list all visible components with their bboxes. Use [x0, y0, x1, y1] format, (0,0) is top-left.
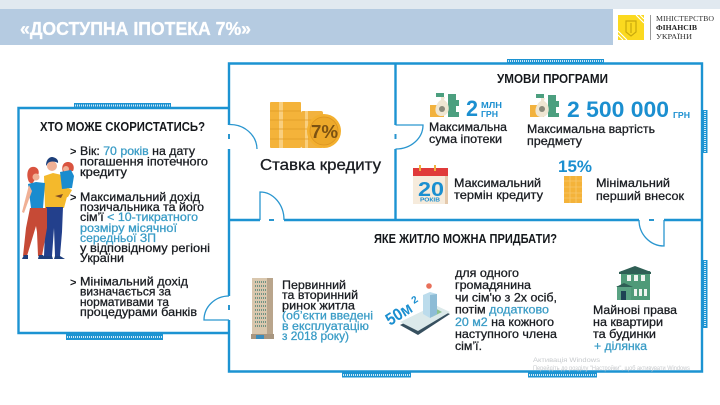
panel: program terms [413, 72, 690, 204]
icon: green house [616, 266, 651, 300]
label: credit rate: Ставка кредиту [260, 157, 381, 174]
text: primary and secondary market: та вторинний [282, 288, 358, 302]
icon: gold stack [564, 176, 582, 203]
stat: max property value: 2 500 000 [567, 97, 669, 122]
list item: maximum income: Максимальний дохід [80, 190, 200, 204]
panel: who can use [22, 120, 210, 319]
list item: age: > [70, 146, 76, 158]
list item: age: Вік: 70 років на дату [80, 144, 195, 158]
text: primary and secondary market: в експлуатацію [282, 319, 369, 333]
list item: maximum income: розміру місячної [80, 221, 178, 235]
text: area norms: наступного члена [455, 327, 557, 341]
icon: apartment tower [251, 278, 274, 339]
text: property rights: + ділянка [594, 339, 647, 353]
stat: max loan: МЛН [481, 101, 502, 110]
list item: age [70, 144, 208, 179]
list item: age: погашення іпотечного [80, 154, 208, 168]
text: max term: термін кредиту [454, 188, 543, 202]
list item: maximum income: у відповідному регіоні [80, 241, 210, 255]
icon: calendar 20 years [413, 165, 448, 204]
list item: minimum income: визначається за [80, 284, 171, 298]
list item: maximum income: позичальника та його [80, 200, 204, 214]
stat: 15 percent: 15% [558, 157, 592, 176]
list item: minimum income [70, 274, 197, 319]
title: «ДОСТУПНА ІПОТЕКА 7%» [20, 19, 251, 39]
text: minimum down payment [596, 176, 685, 203]
text: primary and secondary market [282, 278, 373, 343]
text: area norms: громадянина [455, 278, 531, 292]
heading: who can use: ХТО МОЖЕ СКОРИСТАТИСЬ? [40, 120, 205, 134]
text: primary and secondary market: (об’єкти введені [282, 308, 373, 322]
text: property rights [593, 303, 677, 353]
text: area norms: потім додатково [455, 302, 549, 316]
logo: Ministry of Finance of Ukraine [613, 9, 720, 45]
text: primary and secondary market: ринок житла [282, 298, 355, 312]
text: max term: Максимальний [454, 176, 541, 190]
watermark: Windows activation: Перейдіть до розділу "Настройки", щоб активувати Windows [533, 365, 690, 372]
stat: max loan: сума іпотеки [429, 132, 502, 146]
text: minimum down payment: перший внесок [596, 189, 685, 203]
stat: max property value: Максимальна вартість [527, 122, 655, 136]
list item: minimum income: нормативами та [80, 295, 169, 309]
heading: housing: ЯКЕ ЖИТЛО МОЖНА ПРИДБАТИ? [374, 232, 557, 246]
panel: credit rate [260, 102, 381, 174]
list item: maximum income: сім’ї < 10-тикратного [80, 210, 198, 224]
top strip [0, 0, 720, 9]
icon: 50 m2 phone and building: 50м [382, 298, 416, 329]
icon: family [22, 157, 74, 259]
windows [66, 59, 708, 378]
stat: max loan: 2 [466, 96, 478, 121]
list item: maximum income: середньої ЗП [80, 231, 156, 245]
stat: max loan [429, 96, 507, 146]
logo: Ministry of Finance of Ukraine: УКРАЇНИ [656, 33, 692, 41]
icon: coins 7%: 7% [311, 122, 338, 142]
stat: max property value [527, 97, 690, 148]
icon: calendar 20 years: 20 [418, 179, 444, 201]
text: area norms [455, 266, 557, 353]
text: primary and secondary market: з 2018 року) [282, 329, 349, 343]
logo: Ministry of Finance of Ukraine: ФІНАНСІВ [656, 24, 697, 32]
icon: 50 m2 phone and building [382, 283, 450, 335]
text: primary and secondary market: Первинний [282, 278, 346, 292]
text: property rights: та будинки [593, 327, 656, 341]
list item: maximum income: України [80, 251, 124, 265]
text: property rights: на квартири [593, 315, 663, 329]
heading: program terms: УМОВИ ПРОГРАМИ [497, 72, 608, 86]
panel: what housing can be bought [251, 232, 677, 353]
header banner [0, 9, 613, 45]
text: area norms: сім’ї. [455, 339, 482, 353]
icon: money bag 1 [430, 93, 459, 117]
watermark: Windows activation [533, 356, 690, 372]
text: area norms: 20 м2 на кожного [455, 315, 554, 329]
list item: minimum income: > [70, 277, 76, 289]
list item: minimum income: процедурами банків [80, 305, 197, 319]
text: max term [454, 176, 543, 202]
icon: 50 m2 phone and building: 2 [410, 294, 421, 307]
list item: minimum income: Мінімальний дохід [80, 274, 188, 288]
text: property rights: Майнові права [593, 303, 677, 317]
icon: money bag 2 [530, 94, 559, 117]
list item: maximum income [70, 190, 210, 265]
floor plan walls [18, 64, 702, 372]
text: area norms: для одного [455, 266, 519, 280]
logo: Ministry of Finance of Ukraine: МІНІСТЕРСТВО [656, 15, 714, 23]
icon: calendar 20 years: РОКІВ [420, 198, 440, 204]
stat: max loan: Максимальна [429, 120, 507, 134]
text: minimum down payment: Мінімальний [596, 176, 670, 190]
stat: max property value: предмету [527, 134, 582, 148]
stat: max property value: ГРН [673, 111, 690, 120]
list item: age: кредиту [80, 165, 127, 179]
doors [204, 124, 664, 320]
stat: max loan: ГРН [481, 110, 498, 119]
list item: maximum income: > [70, 192, 76, 204]
text: area norms: чи сім'ю з 2х осіб, [455, 290, 557, 304]
watermark: Windows activation: Активація Windows [533, 356, 601, 364]
